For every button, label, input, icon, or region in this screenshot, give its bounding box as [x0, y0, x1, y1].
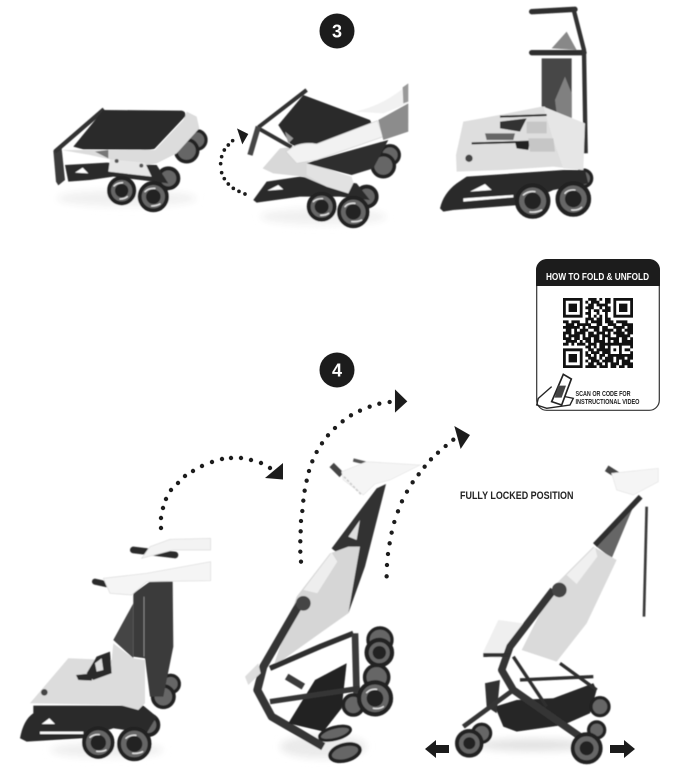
stroller fully open and locked — [457, 468, 658, 762]
scan instruction text: SCAN OR CODE FOR — [576, 391, 630, 398]
QR card: how to fold and unfold — [536, 259, 660, 410]
QR code — [563, 299, 633, 367]
step 3 badge: 3 — [332, 22, 342, 42]
stroller unfolding, tilted on rear wheels — [245, 460, 420, 764]
card header: HOW TO FOLD & UNFOLD — [546, 272, 649, 283]
curved dotted arrow, step 3 — [221, 128, 248, 194]
left curved dotted arrow above middle stroller — [300, 389, 407, 562]
step 4 badge — [320, 352, 354, 388]
step 3 badge — [320, 14, 354, 48]
curved dotted arrow toward middle stroller — [161, 458, 283, 528]
scan instruction text: INSTRUCTIONAL VIDEO — [576, 399, 640, 406]
stroller folded with both hands on handle — [20, 538, 211, 759]
scan instruction text — [576, 391, 640, 406]
label: fully locked position: FULLY LOCKED POSITION — [460, 490, 574, 502]
card header — [536, 259, 660, 286]
right curved dotted arrow beside middle stroller — [387, 426, 470, 576]
stroller folded flat, seat on top — [53, 109, 206, 210]
arrow: wheels spreading right — [610, 740, 635, 758]
arrow: wheels spreading left — [425, 740, 449, 758]
icon: hand holding phone — [537, 374, 573, 408]
stroller partly unfolded with hands — [250, 83, 408, 226]
stroller half raised, seat upright — [440, 8, 592, 217]
step 4 badge: 4 — [332, 360, 342, 380]
